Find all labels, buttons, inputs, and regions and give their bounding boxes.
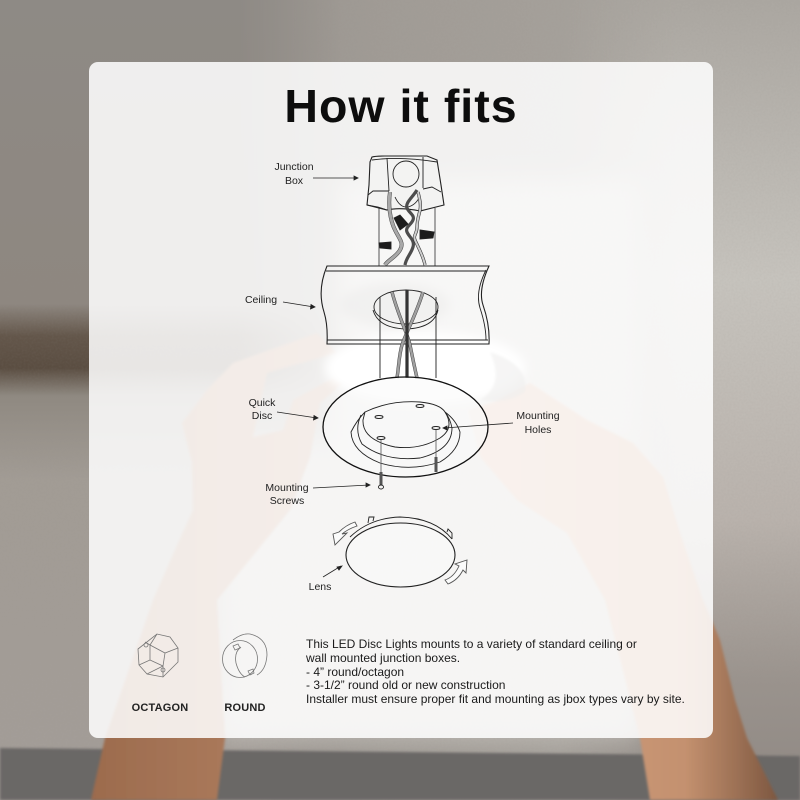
lens bbox=[346, 517, 455, 587]
diagram labels: Mounting bbox=[516, 410, 560, 422]
rotation arrows bbox=[333, 522, 467, 584]
description text bbox=[306, 637, 685, 706]
title: How it fits bbox=[284, 80, 518, 132]
diagram labels: Mounting bbox=[265, 482, 309, 494]
description text: - 4” round/octagon bbox=[306, 665, 404, 679]
label: octagon: OCTAGON bbox=[132, 702, 188, 714]
description text: Installer must ensure proper fit and mounting as jbox types vary by site. bbox=[306, 692, 685, 706]
diagram labels bbox=[245, 161, 560, 593]
description text: - 3-1/2” round old or new construction bbox=[306, 678, 505, 692]
diagram labels: Junction bbox=[274, 161, 314, 173]
icon: octagon junction box bbox=[138, 634, 178, 677]
mounting screws bbox=[378, 430, 438, 489]
leader arrows bbox=[277, 176, 513, 577]
description text: This LED Disc Lights mounts to a variety of standard ceiling or bbox=[306, 637, 637, 651]
diagram labels: Holes bbox=[525, 424, 551, 436]
description text: wall mounted junction boxes. bbox=[306, 651, 460, 665]
panel: translucent white card bbox=[89, 62, 713, 738]
label: round: ROUND bbox=[224, 702, 266, 714]
diagram labels: Disc bbox=[252, 410, 272, 422]
diagram labels: Quick bbox=[249, 397, 276, 409]
icon: round junction box bbox=[222, 634, 267, 678]
quick disc bbox=[323, 377, 488, 477]
diagram labels: Lens bbox=[309, 581, 331, 593]
junction box bbox=[367, 156, 444, 266]
diagram labels: Box bbox=[285, 175, 304, 187]
ceiling slab bbox=[321, 266, 489, 378]
diagram labels: Screws bbox=[270, 495, 304, 507]
diagram labels: Ceiling bbox=[245, 294, 277, 306]
